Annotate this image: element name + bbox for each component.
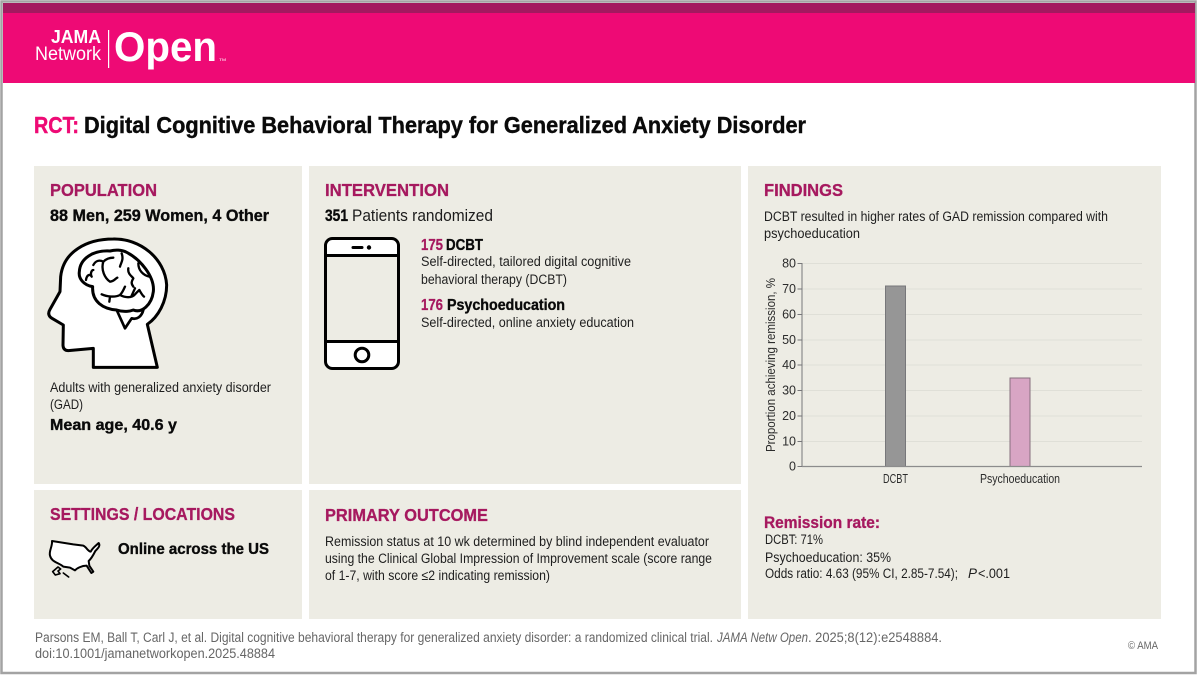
- participant counts: 88 Men, 259 Women, 4 Other: [50, 207, 270, 225]
- citation: [35, 630, 942, 661]
- category labels: Psychoeducation: [980, 472, 1060, 486]
- axis tick labels: 50: [782, 333, 796, 347]
- remission rate results: <.001: [978, 566, 1010, 581]
- axis tick labels: 30: [782, 384, 796, 398]
- icon: smartphone: [326, 238, 398, 368]
- bar: psychoeducation 35%: [1010, 378, 1030, 466]
- patients randomized: Patients randomized: [352, 207, 493, 225]
- axis tick labels: 0: [789, 460, 796, 474]
- remission rate results: [764, 514, 1010, 581]
- arm: psychoeducation: Psychoeducation: [447, 297, 565, 314]
- title: RCT:: [34, 112, 79, 138]
- heading: settings: SETTINGS / LOCATIONS: [50, 504, 235, 524]
- heading: primary outcome: PRIMARY OUTCOME: [325, 505, 488, 525]
- setting label: Online across the US: [118, 541, 269, 558]
- outcome description: of 1-7, with score ≤2 indicating remission): [325, 568, 550, 583]
- arm: psychoeducation: [421, 297, 634, 330]
- outcome description: using the Clinical Global Impression of Improvement scale (score range: [325, 551, 712, 566]
- axis tick labels: 40: [782, 358, 796, 372]
- header banner: [3, 3, 1195, 83]
- arm: psychoeducation: Self-directed, online anxiety education: [421, 315, 634, 330]
- remission rate results: Remission rate:: [764, 514, 880, 532]
- arm: DCBT: DCBT: [446, 237, 483, 254]
- arm: DCBT: Self-directed, tailored digital cognitive: [421, 254, 631, 269]
- population description: Adults with generalized anxiety disorder: [50, 380, 271, 395]
- axis tick labels: 80: [782, 256, 796, 270]
- JAMA Network Open logo: [35, 23, 226, 70]
- findings summary: [764, 209, 1108, 241]
- JAMA Network Open logo: TM: [219, 57, 226, 62]
- bar: DCBT 71%: [886, 286, 906, 466]
- title: Digital Cognitive Behavioral Therapy for Generalized Anxiety Disorder: [84, 112, 806, 138]
- panel: findings: [748, 166, 1161, 619]
- panel: settings and locations: [34, 490, 302, 619]
- JAMA Network Open logo: Open: [114, 23, 217, 70]
- heading: population: POPULATION: [50, 180, 157, 200]
- copyright: © AMA: [1128, 640, 1159, 652]
- panel: intervention: [309, 166, 741, 484]
- axis tick labels: 70: [782, 282, 796, 296]
- axis tick labels: [782, 256, 796, 474]
- citation: JAMA Netw Open: [716, 630, 808, 645]
- JAMA Network Open logo: Network: [35, 44, 101, 65]
- outcome description: Remission status at 10 wk determined by blind independent evaluator: [325, 534, 709, 549]
- arm: psychoeducation: 176: [421, 297, 443, 314]
- citation: doi:10.1001/jamanetworkopen.2025.48884: [35, 646, 275, 661]
- category labels: DCBT: [883, 472, 908, 486]
- arm: DCBT: 175: [421, 237, 443, 254]
- findings summary: DCBT resulted in higher rates of GAD remission compared with: [764, 209, 1108, 224]
- population description: (GAD): [50, 397, 83, 412]
- axis title: Proportion achieving remission, %: [764, 278, 778, 452]
- arm: DCBT: [421, 237, 631, 287]
- axis tick labels: 60: [782, 308, 796, 322]
- heading: intervention: INTERVENTION: [325, 180, 449, 200]
- citation: Parsons EM, Ball T, Carl J, et al. Digital cognitive behavioral therapy for generalized anxiety disorder: a randomized clinical trial.: [35, 630, 713, 645]
- mean age: Mean age, 40.6 y: [50, 417, 177, 434]
- arm: DCBT: behavioral therapy (DCBT): [421, 272, 567, 287]
- remission rate results: DCBT: 71%: [765, 532, 823, 547]
- population description: [50, 380, 271, 412]
- icon: US map: [50, 541, 99, 577]
- remission rate results: P: [968, 566, 977, 581]
- panel: population: [34, 166, 302, 484]
- patients randomized: 351: [325, 207, 348, 225]
- axis tick labels: 10: [782, 434, 796, 448]
- panel: primary outcome: [309, 490, 741, 619]
- findings summary: psychoeducation: [764, 226, 860, 241]
- icon: head with brain: [49, 239, 167, 367]
- citation: . 2025;8(12):e2548884.: [808, 630, 942, 645]
- remission rate results: Psychoeducation: 35%: [765, 550, 891, 565]
- JAMA Network Open logo: JAMA: [51, 27, 101, 47]
- bar chart: proportion achieving remission: [764, 256, 1142, 486]
- category labels: [883, 472, 1060, 486]
- axis tick labels: 20: [782, 409, 796, 423]
- outcome description: [325, 534, 712, 583]
- remission rate results: Odds ratio: 4.63 (95% CI, 2.85-7.54);: [765, 566, 958, 581]
- heading: findings: FINDINGS: [764, 180, 843, 200]
